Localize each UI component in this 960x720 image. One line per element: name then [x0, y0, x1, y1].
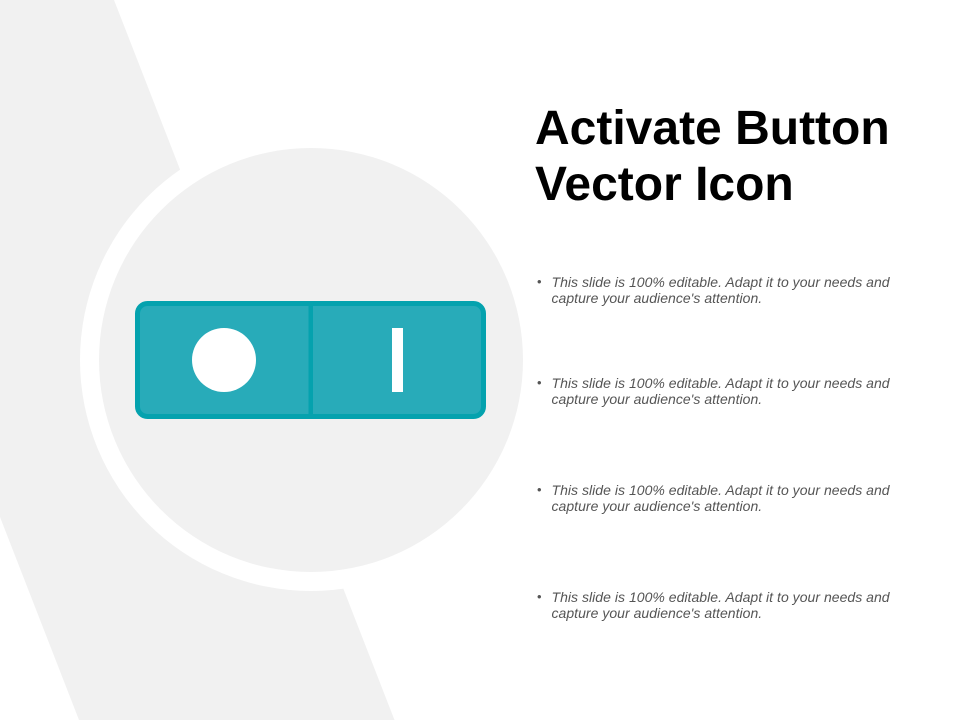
bullet text 2 [537, 375, 890, 407]
bullet text 4 [537, 589, 890, 621]
bullet text 4: This slide is 100% editable. Adapt it to your needs and [552, 589, 890, 605]
bullet text 2: • [537, 375, 542, 390]
bullet text 3: This slide is 100% editable. Adapt it to your needs and [552, 482, 890, 498]
bullet text 4: capture your audience's attention. [552, 605, 762, 621]
bullet text 1 [537, 274, 890, 306]
bullet text 1: capture your audience's attention. [552, 290, 762, 306]
title: Vector Icon [535, 158, 794, 211]
bullet text 2: This slide is 100% editable. Adapt it to your needs and [552, 375, 890, 391]
bullet text 3: capture your audience's attention. [552, 498, 762, 514]
bullet text 3 [537, 482, 890, 514]
bullet text 4: • [537, 589, 542, 604]
title: Activate Button [535, 102, 890, 155]
bullet text 3: • [537, 482, 542, 497]
bullet text 1: This slide is 100% editable. Adapt it to your needs and [552, 274, 890, 290]
title [535, 102, 890, 211]
bullet text 2: capture your audience's attention. [552, 391, 762, 407]
bullet text 1: • [537, 274, 542, 289]
